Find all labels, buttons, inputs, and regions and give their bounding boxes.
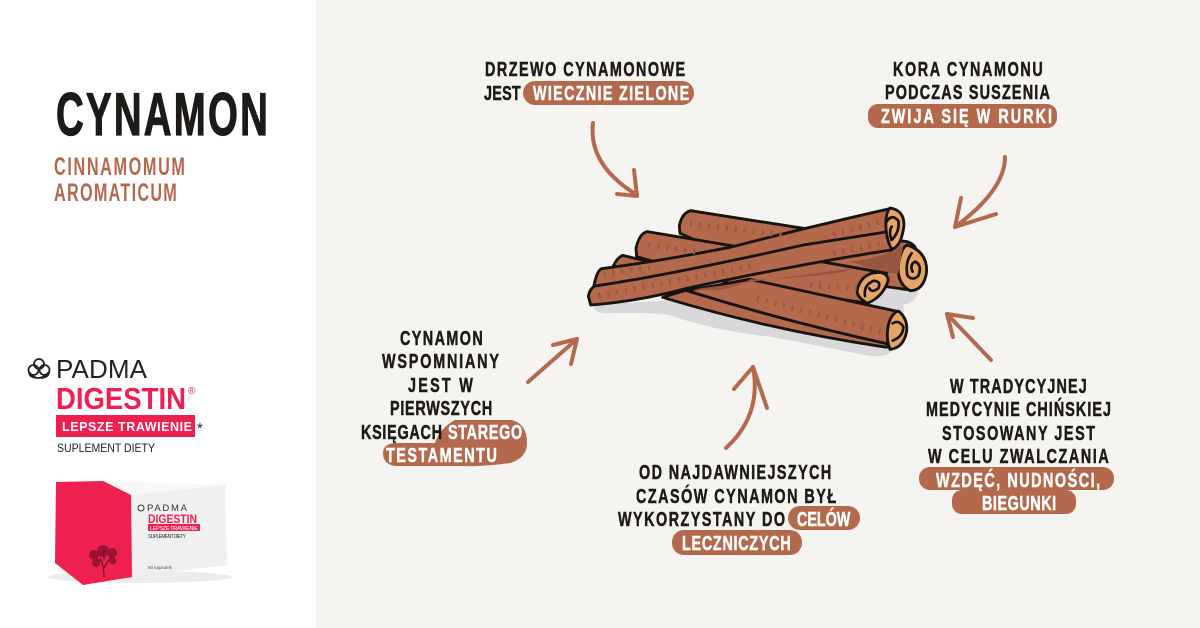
callout: evergreen tree xyxy=(484,58,694,105)
callout: Old Testament: WSPOMNIANY xyxy=(382,350,499,373)
highlight xyxy=(523,81,694,105)
highlight xyxy=(919,467,1114,490)
callout: medicinal use: LECZNICZYCH xyxy=(682,532,791,555)
callout: Chinese medicine: BIEGUNKI xyxy=(982,492,1056,515)
front right stick xyxy=(687,279,907,349)
callout: Old Testament: KSIĘGACH xyxy=(361,421,442,444)
callout: bark rolls: PODCZAS SUSZENIA xyxy=(885,81,1050,104)
subtitle: latin name xyxy=(54,154,185,207)
box labels xyxy=(138,505,144,511)
callout: medicinal use: OD NAJDAWNIEJSZYCH xyxy=(639,461,831,484)
title: CYNAMON xyxy=(56,80,268,148)
arrow: top left xyxy=(593,123,637,196)
callout: bark rolls: ZWIJA SIĘ W RURKI xyxy=(881,105,1052,128)
callout: Chinese medicine: W CELU ZWALCZANIA xyxy=(928,445,1109,468)
far left stub stick xyxy=(613,255,647,270)
product box: SUPLEMENT DIETY xyxy=(148,534,187,540)
callout: Old Testament: JEST W xyxy=(408,374,473,397)
subtitle: latin name: AROMATICUM xyxy=(54,180,177,207)
arrow: bottom xyxy=(726,367,767,448)
product box: LEPSZE TRAWIENIE xyxy=(150,526,198,532)
callout: Old Testament: PIERWSZYCH xyxy=(390,397,492,420)
callout: bark rolls: KORA CYNAMONU xyxy=(893,58,1043,81)
subtitle: latin name: CINNAMOMUM xyxy=(54,154,185,181)
product name: DIGESTIN xyxy=(56,381,186,416)
bark texture xyxy=(598,222,883,332)
product box: PADMA xyxy=(147,503,188,514)
box tree xyxy=(93,550,112,577)
highlight xyxy=(788,506,860,530)
product box xyxy=(48,481,232,585)
callout: Chinese medicine: WZDĘĆ, NUDNOŚCI, xyxy=(936,469,1100,492)
brand logo: Padma Digestin: ® xyxy=(188,386,196,397)
callout: Old Testament: STAREGO xyxy=(448,421,522,444)
panel: right background xyxy=(316,0,1200,628)
callout: medicinal use: CZASÓW CYNAMON BYŁ xyxy=(636,485,836,508)
highlight xyxy=(383,420,527,466)
icon: padma lotus xyxy=(28,359,50,378)
callout: Old Testament: TESTAMENTU xyxy=(386,444,497,467)
callout: Chinese medicine: MEDYCYNIE CHIŃSKIEJ xyxy=(926,398,1111,421)
callout: Old Testament: CYNAMON xyxy=(400,327,483,350)
product type: SUPLEMENT DIETY xyxy=(57,441,155,455)
arrow: left xyxy=(528,339,577,382)
brand logo: Padma Digestin: LEPSZE TRAWIENIE xyxy=(62,420,192,434)
product tag xyxy=(56,415,195,437)
callout: medicinal use: WYKORZYSTANY DO xyxy=(618,508,785,531)
highlight xyxy=(868,104,1057,128)
callout: evergreen tree: WIECZNIE ZIELONE xyxy=(533,82,689,105)
back stick with spiral xyxy=(679,211,927,291)
callout: bark rolls xyxy=(868,58,1057,128)
callout: evergreen tree: JEST xyxy=(484,82,521,105)
left middle stick xyxy=(636,232,888,303)
crossing sticks xyxy=(588,208,904,305)
shadow xyxy=(593,287,918,356)
brand logo: Padma Digestin xyxy=(28,354,203,455)
brand logo: Padma Digestin: * xyxy=(197,420,203,437)
product box: DIGESTIN xyxy=(148,512,197,526)
product box: 60 kapsułek xyxy=(148,565,173,570)
callout: medicinal use: CELÓW xyxy=(797,508,851,531)
lower stick xyxy=(663,290,890,347)
callout: Chinese medicine xyxy=(919,375,1114,515)
callout: Chinese medicine: W TRADYCYJNEJ xyxy=(950,375,1087,398)
arrow: bottom right xyxy=(947,314,991,360)
callout: Old Testament xyxy=(361,327,527,467)
callout: medicinal use xyxy=(618,461,860,555)
shaded underside xyxy=(693,268,853,291)
callout: evergreen tree: DRZEWO CYNAMONOWE xyxy=(485,58,685,81)
callout: Chinese medicine: STOSOWANY JEST xyxy=(942,422,1095,445)
brand name: PADMA xyxy=(56,354,148,384)
arrow: top right xyxy=(955,157,1005,227)
illustration: cinnamon sticks xyxy=(588,208,927,356)
